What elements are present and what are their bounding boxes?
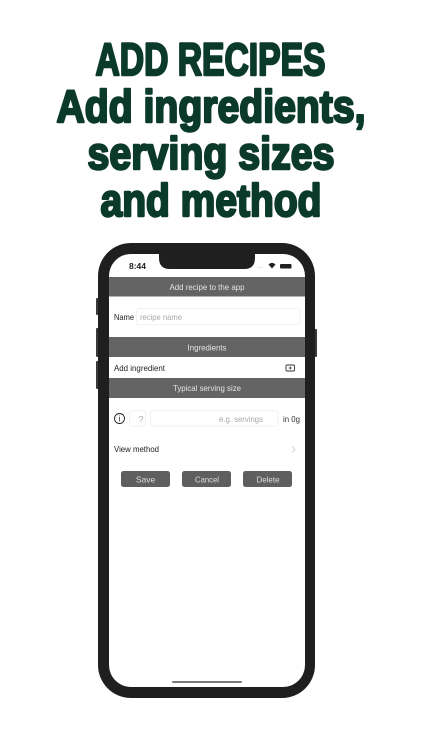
cancel button: Cancel xyxy=(195,474,219,484)
view method row xyxy=(114,444,295,454)
icon: info xyxy=(114,414,124,424)
add ingredient row xyxy=(114,363,294,373)
name row xyxy=(114,308,300,324)
home indicator xyxy=(172,681,242,683)
title xyxy=(56,34,366,226)
view method row: View method xyxy=(114,444,159,454)
status bar icons xyxy=(257,263,292,270)
name row: Name xyxy=(114,312,134,322)
status bar icons: .... xyxy=(257,264,264,270)
header bar: add recipe: Add recipe to the app xyxy=(170,282,245,292)
cancel button xyxy=(182,471,231,487)
side buttons xyxy=(96,298,317,389)
notch xyxy=(159,254,255,269)
delete button xyxy=(243,471,292,487)
serving size row xyxy=(114,410,300,426)
phone mockup xyxy=(96,243,317,698)
icon: chevron xyxy=(292,446,295,452)
phone frame xyxy=(98,243,315,698)
header bar: typical serving size xyxy=(109,378,305,398)
header bar: ingredients: Ingredients xyxy=(188,342,226,352)
title line 2: Add ingredients, xyxy=(56,81,366,132)
serving size row: in 0g xyxy=(283,414,300,424)
icon: add box xyxy=(286,365,294,371)
save button: Save xyxy=(136,474,155,484)
name row: recipe name xyxy=(140,312,182,322)
status bar time: 8:44 xyxy=(129,261,146,271)
title line 1: ADD RECIPES xyxy=(96,34,326,85)
header bar: typical serving size: Typical serving size xyxy=(173,383,241,393)
title line 4: and method xyxy=(100,175,322,226)
header bar: add recipe xyxy=(109,277,305,296)
delete button: Delete xyxy=(256,474,280,484)
title line 3: serving sizes xyxy=(88,128,334,179)
serving size row: ? xyxy=(139,414,144,424)
screen xyxy=(109,254,305,687)
add ingredient row: Add ingredient xyxy=(114,363,166,373)
save button xyxy=(121,471,170,487)
serving size row: e.g. servings xyxy=(219,414,263,424)
header bar: ingredients xyxy=(109,337,305,357)
icon: info: i xyxy=(119,414,121,424)
